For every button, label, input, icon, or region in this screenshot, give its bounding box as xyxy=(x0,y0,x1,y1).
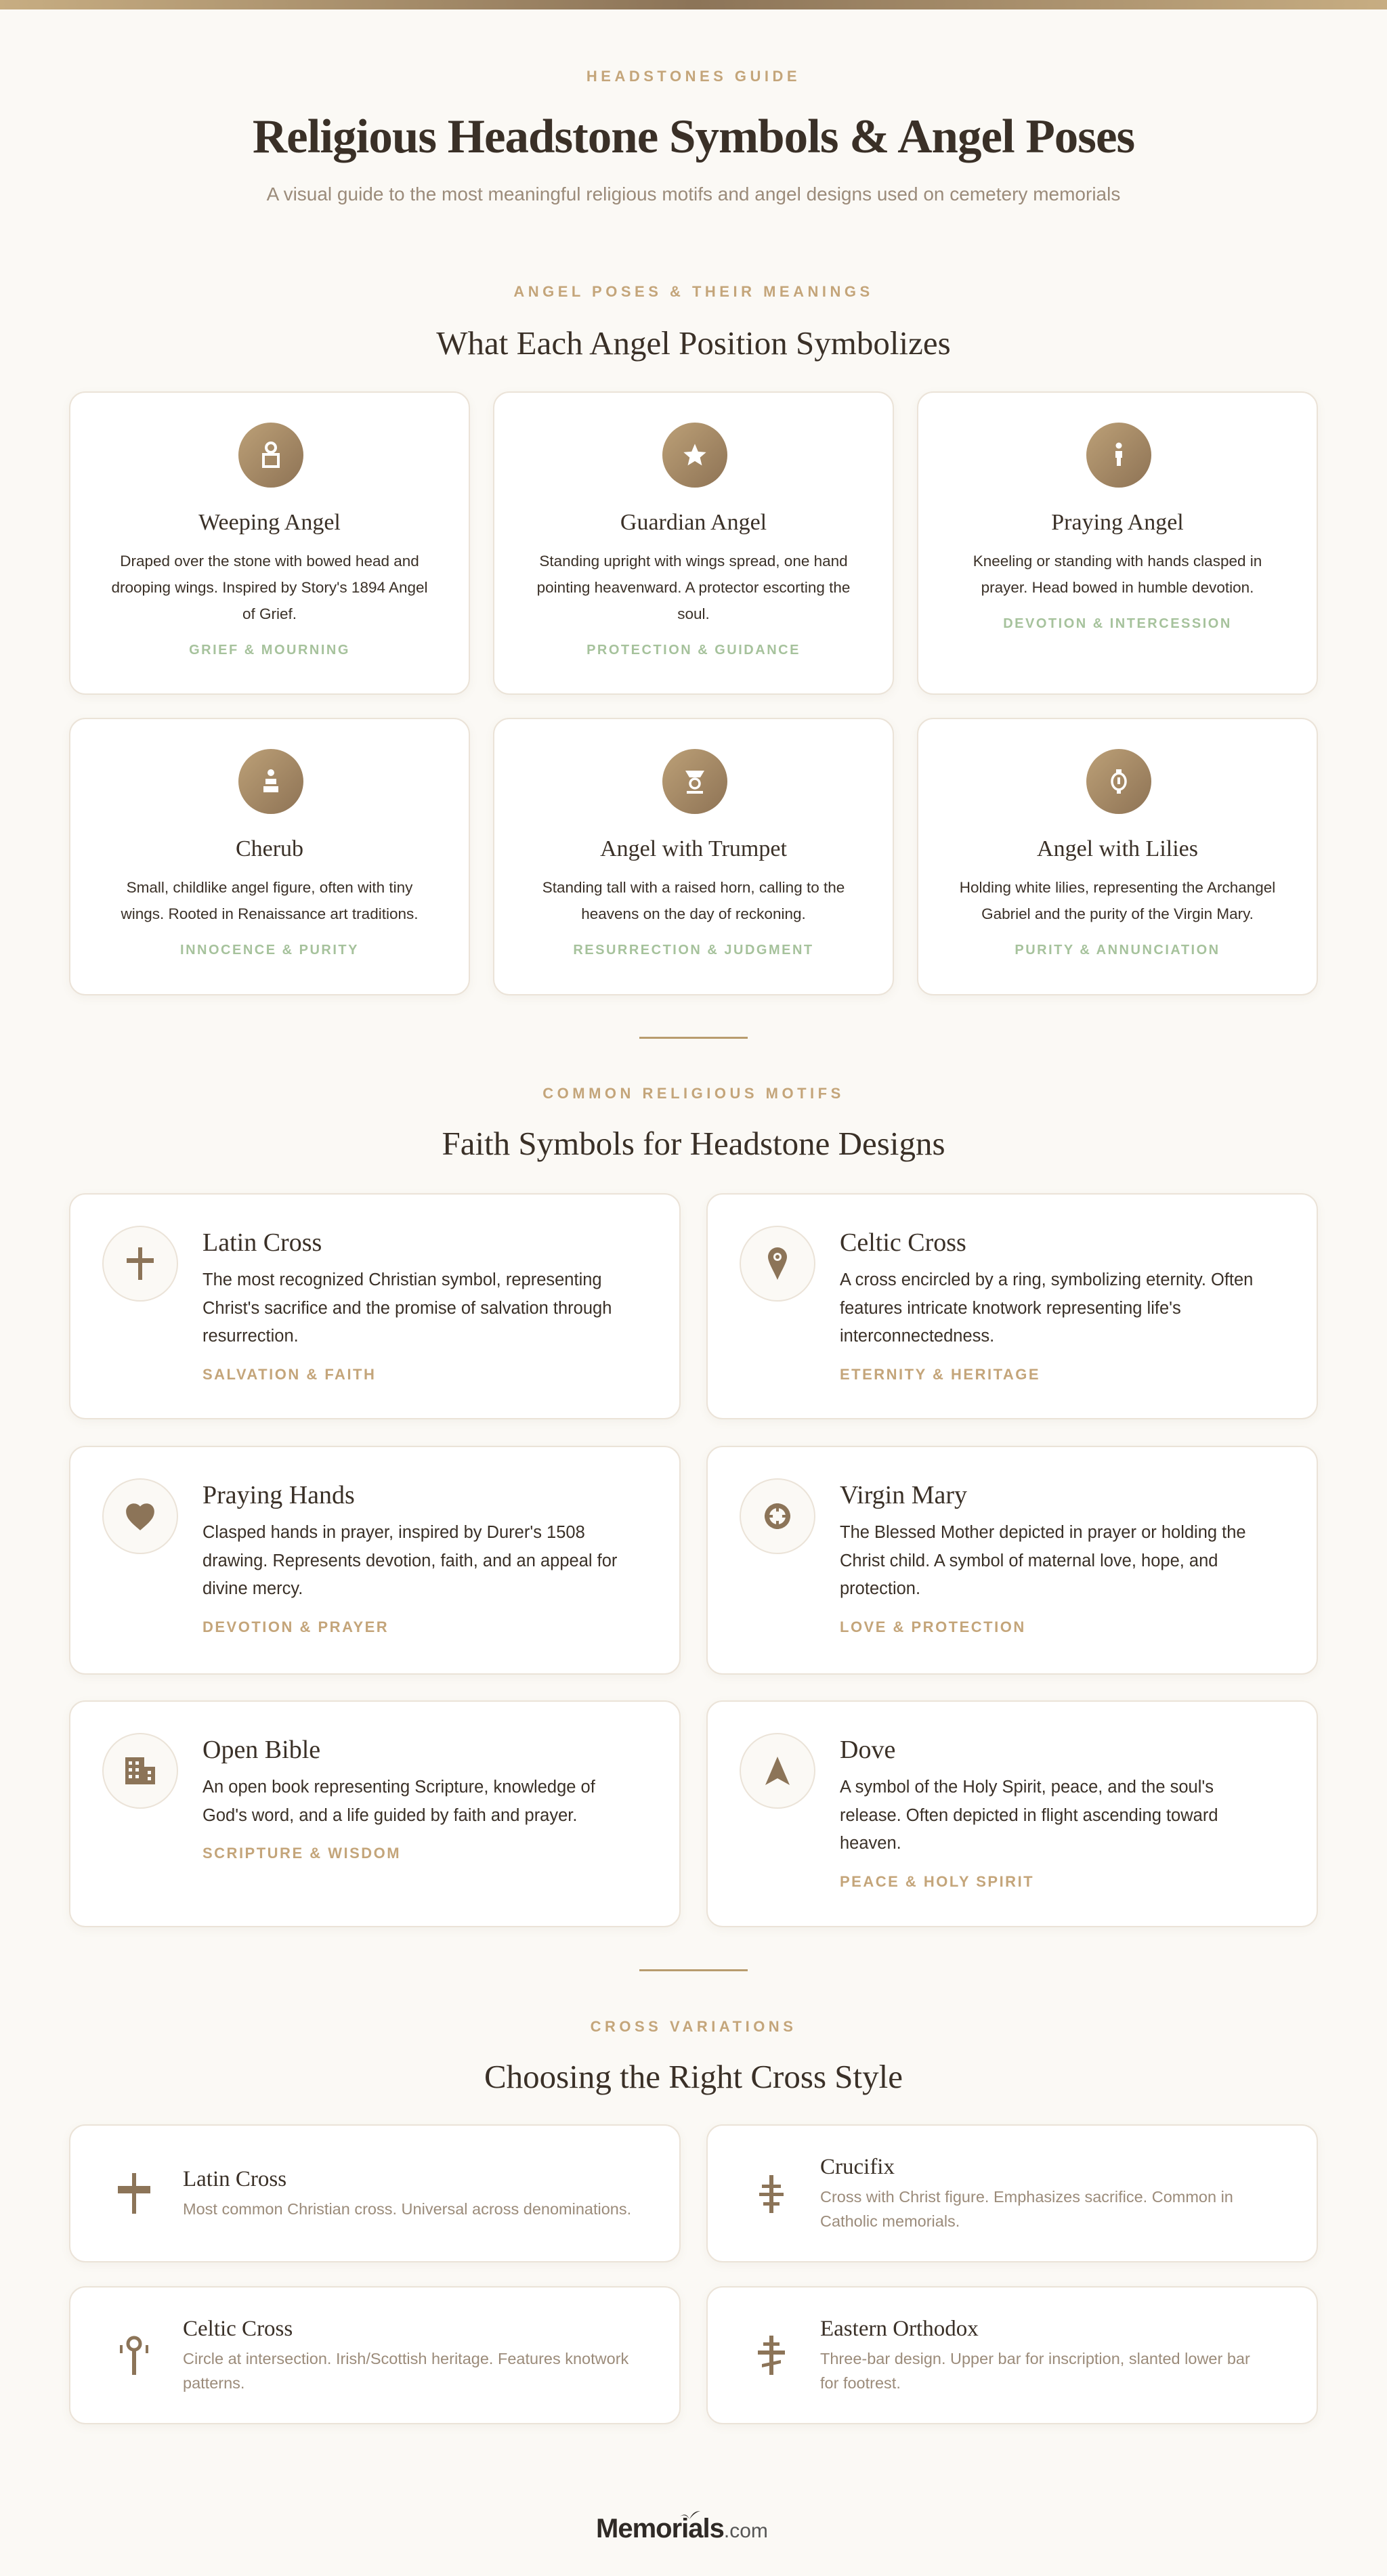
panel: guardian angel xyxy=(493,391,894,695)
description: pointing heavenward. A protector escorting the xyxy=(537,579,850,596)
text: An open book representing Scripture, knowledge of xyxy=(202,1778,595,1797)
text: Most common Christian cross. Universal across denominations. xyxy=(183,2200,631,2218)
icon: lily xyxy=(1086,749,1151,814)
panel: praying hands xyxy=(69,1446,681,1675)
description xyxy=(960,879,1275,958)
description: GRIEF & MOURNING xyxy=(189,643,350,658)
description: PROTECTION & GUIDANCE xyxy=(586,643,801,658)
text: resurrection. xyxy=(202,1327,299,1346)
text: A cross encircled by a ring, symbolizing eternity. Often xyxy=(840,1270,1253,1289)
text xyxy=(202,1736,595,1862)
text: Latin Cross xyxy=(183,2167,286,2191)
icon: crucifix xyxy=(759,2175,784,2213)
icon: latin cross xyxy=(118,2173,150,2214)
description: PURITY & ANNUNCIATION xyxy=(1015,943,1220,958)
text: SCRIPTURE & WISDOM xyxy=(202,1845,401,1862)
text: protection. xyxy=(840,1579,920,1598)
kicker: headstones guide: HEADSTONES GUIDE xyxy=(586,68,801,85)
text: God's word, and a life guided by faith and prayer. xyxy=(202,1805,577,1824)
icon: celtic cross xyxy=(120,2336,148,2375)
icon: cherub xyxy=(238,749,303,814)
description: soul. xyxy=(677,605,710,622)
panel: angel with trumpet xyxy=(493,718,894,995)
text: The Blessed Mother depicted in prayer or holding the xyxy=(840,1523,1246,1542)
text xyxy=(820,2317,1250,2392)
panel: weeping angel xyxy=(69,391,470,695)
text: Latin Cross xyxy=(202,1228,322,1257)
description: prayer. Head bowed in humble devotion. xyxy=(981,579,1254,596)
icon: orthodox cross xyxy=(758,2336,785,2375)
panel: crucifix xyxy=(706,2124,1318,2262)
description: Draped over the stone with bowed head and xyxy=(120,553,419,570)
description: DEVOTION & INTERCESSION xyxy=(1003,616,1232,631)
panel: eastern orthodox xyxy=(706,2286,1318,2424)
panel: latin cross variation xyxy=(69,2124,681,2262)
description: Small, childlike angel figure, often with tiny xyxy=(127,879,412,896)
text: The most recognized Christian symbol, representing xyxy=(202,1270,602,1289)
top gradient bar xyxy=(0,0,1387,9)
text xyxy=(840,1481,1246,1635)
title: Guardian Angel xyxy=(620,510,767,535)
description xyxy=(973,553,1262,631)
text: Cross with Christ figure. Emphasizes sacrifice. Common in xyxy=(820,2188,1233,2206)
title: Angel with Trumpet xyxy=(600,836,787,861)
text: Catholic memorials. xyxy=(820,2212,960,2230)
subtitle: A visual guide to the most meaningful religious motifs and angel designs used on cemetery memorials xyxy=(267,184,1120,205)
panel: virgin mary xyxy=(706,1446,1318,1675)
description xyxy=(121,879,418,958)
title: Weeping Angel xyxy=(198,510,341,535)
panel: angel with lilies xyxy=(917,718,1318,995)
description xyxy=(542,879,845,958)
icon: ring xyxy=(740,1478,815,1554)
text: Christ's sacrifice and the promise of salvation through xyxy=(202,1299,612,1318)
text: Eastern Orthodox xyxy=(820,2317,979,2341)
icon: star xyxy=(662,423,727,488)
description: Standing tall with a raised horn, calling to the xyxy=(542,879,845,896)
text: A symbol of the Holy Spirit, peace, and the soul's xyxy=(840,1778,1214,1797)
text: Christ child. A symbol of maternal love, hope, and xyxy=(840,1551,1218,1570)
panel: open bible xyxy=(69,1700,681,1927)
description xyxy=(111,553,428,658)
heading: cross style: Choosing the Right Cross Style xyxy=(484,2058,903,2095)
title: Religious Headstone Symbols & Angel Poses xyxy=(253,110,1134,163)
title: Cherub xyxy=(236,836,303,861)
text xyxy=(202,1228,612,1383)
icon: arrow xyxy=(740,1733,815,1809)
text: PEACE & HOLY SPIRIT xyxy=(840,1873,1034,1889)
logo: memorials.com: Memorials.com xyxy=(596,2514,768,2543)
icon: heart xyxy=(102,1478,178,1554)
text: SALVATION & FAITH xyxy=(202,1365,376,1383)
text: Dove xyxy=(840,1736,895,1764)
description: drooping wings. Inspired by Story's 1894 Angel xyxy=(111,579,428,596)
text: patterns. xyxy=(183,2374,244,2392)
text xyxy=(202,1481,617,1635)
description: Holding white lilies, representing the Archangel xyxy=(960,879,1275,896)
panel: dove xyxy=(706,1700,1318,1927)
description: Standing upright with wings spread, one hand xyxy=(539,553,848,570)
description: wings. Rooted in Renaissance art traditions. xyxy=(121,905,418,922)
text xyxy=(840,1228,1253,1383)
description: RESURRECTION & JUDGMENT xyxy=(573,943,814,958)
text: divine mercy. xyxy=(202,1579,303,1598)
icon: weeping angel xyxy=(238,423,303,488)
description: of Grief. xyxy=(242,605,297,622)
heading: faith symbols: Faith Symbols for Headstone Designs xyxy=(442,1125,945,1162)
kicker: angel poses: ANGEL POSES & THEIR MEANINGS xyxy=(513,283,874,300)
text xyxy=(183,2317,628,2392)
text xyxy=(820,2155,1233,2230)
text: interconnectedness. xyxy=(840,1327,994,1346)
panel: cherub xyxy=(69,718,470,995)
title: Praying Angel xyxy=(1051,510,1184,535)
panel: celtic cross variation xyxy=(69,2286,681,2424)
text: DEVOTION & PRAYER xyxy=(202,1618,389,1635)
description: heavens on the day of reckoning. xyxy=(581,905,806,922)
kicker: cross variations: CROSS VARIATIONS xyxy=(591,2018,796,2035)
description: Gabriel and the purity of the Virgin Mary. xyxy=(981,905,1254,922)
text: release. Often depicted in flight ascending toward xyxy=(840,1805,1218,1824)
text xyxy=(183,2167,631,2218)
text: Virgin Mary xyxy=(840,1481,967,1509)
text: Celtic Cross xyxy=(840,1228,966,1257)
text xyxy=(840,1736,1218,1889)
text: Crucifix xyxy=(820,2155,895,2179)
text: for footrest. xyxy=(820,2374,901,2392)
text: Praying Hands xyxy=(202,1481,355,1509)
panel: latin cross motif xyxy=(69,1193,681,1419)
panel: praying angel xyxy=(917,391,1318,695)
description: Kneeling or standing with hands clasped in xyxy=(973,553,1262,570)
text: Celtic Cross xyxy=(183,2317,293,2341)
icon: trumpet xyxy=(662,749,727,814)
icon: bible grid xyxy=(102,1733,178,1809)
text: Open Bible xyxy=(202,1736,320,1764)
text: heaven. xyxy=(840,1834,901,1853)
text: Clasped hands in prayer, inspired by Durer's 1508 xyxy=(202,1523,585,1542)
title: Angel with Lilies xyxy=(1037,836,1198,861)
text: drawing. Represents devotion, faith, and an appeal for xyxy=(202,1551,617,1570)
description: INNOCENCE & PURITY xyxy=(180,943,359,958)
panel: celtic cross motif xyxy=(706,1193,1318,1419)
text: Three-bar design. Upper bar for inscription, slanted lower bar xyxy=(820,2350,1250,2367)
icon: figure xyxy=(1086,423,1151,488)
icon: celtic xyxy=(740,1226,815,1302)
text: Circle at intersection. Irish/Scottish heritage. Features knotwork xyxy=(183,2350,628,2367)
description xyxy=(537,553,850,658)
kicker: motifs: COMMON RELIGIOUS MOTIFS xyxy=(542,1085,845,1102)
heading: angel positions: What Each Angel Position Symbolizes xyxy=(436,324,951,362)
icon: cross xyxy=(102,1226,178,1302)
text: ETERNITY & HERITAGE xyxy=(840,1365,1040,1383)
text: features intricate knotwork representing life's xyxy=(840,1299,1181,1318)
text: LOVE & PROTECTION xyxy=(840,1618,1026,1635)
